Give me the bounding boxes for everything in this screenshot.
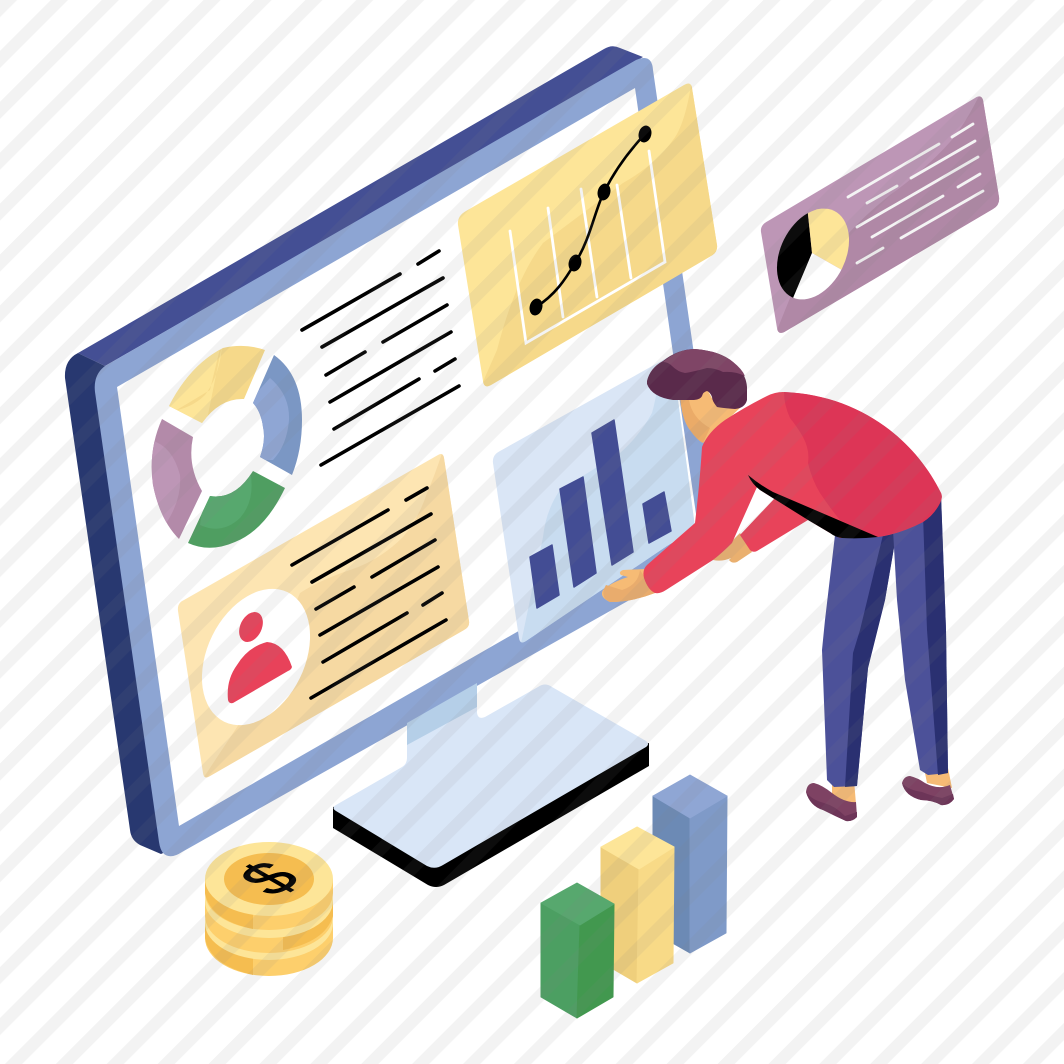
donut: yellow segment	[169, 346, 265, 423]
stand base side	[333, 743, 649, 887]
top coin	[205, 842, 333, 930]
person	[602, 349, 954, 821]
stand neck	[407, 683, 477, 750]
card shading	[478, 78, 725, 393]
shirt shading	[784, 392, 942, 537]
coin stack	[205, 842, 333, 976]
avatar circle	[194, 565, 318, 749]
donut chart	[152, 346, 302, 548]
donut: blue segment	[253, 355, 302, 475]
left leg	[822, 530, 897, 787]
monitor frame	[95, 58, 722, 856]
panel: pie chart card	[761, 88, 1005, 340]
pie chart	[776, 208, 849, 300]
back arm	[740, 498, 808, 552]
card shading	[773, 88, 1005, 340]
text lines on screen	[302, 251, 459, 465]
card base	[458, 84, 717, 386]
card shading	[522, 394, 694, 642]
panel: bar chart card	[493, 355, 700, 648]
card text lines	[848, 124, 983, 263]
right leg	[893, 495, 948, 775]
donut: mauve segment	[152, 419, 202, 539]
dollar sign: $	[224, 852, 315, 905]
blue bar	[653, 775, 727, 953]
shirt	[643, 392, 942, 593]
monitor screen	[117, 88, 698, 826]
chart grid	[510, 151, 665, 343]
card base	[178, 454, 469, 777]
yellow bar	[601, 827, 674, 983]
donut: green segment	[188, 471, 285, 548]
right shoe	[902, 776, 954, 805]
panel: profile card	[178, 450, 475, 783]
3D bars	[541, 775, 727, 1018]
chart points	[528, 124, 653, 317]
avatar head	[237, 607, 265, 647]
card shading	[200, 450, 475, 783]
left shoe	[806, 783, 857, 821]
card base	[493, 355, 695, 642]
shirt inner shadow	[748, 475, 878, 538]
bars	[530, 420, 671, 608]
middle coin	[205, 864, 333, 953]
back hand	[713, 533, 752, 563]
panel: line chart card	[458, 78, 725, 393]
ankles	[832, 768, 952, 804]
hair highlight	[663, 349, 745, 376]
monitor left side	[65, 353, 170, 854]
face	[680, 389, 742, 443]
card base	[761, 96, 999, 333]
coin centre	[224, 853, 314, 905]
bottom coin	[205, 886, 333, 976]
green bar	[541, 883, 614, 1018]
front hand	[602, 569, 655, 602]
chart curve	[536, 134, 645, 307]
card text lines	[292, 488, 446, 698]
avatar body	[228, 642, 292, 703]
hair	[647, 349, 747, 409]
monitor	[65, 46, 722, 856]
monitor top edge	[78, 46, 643, 366]
stand base top	[334, 684, 648, 868]
monitor stand	[333, 683, 649, 887]
